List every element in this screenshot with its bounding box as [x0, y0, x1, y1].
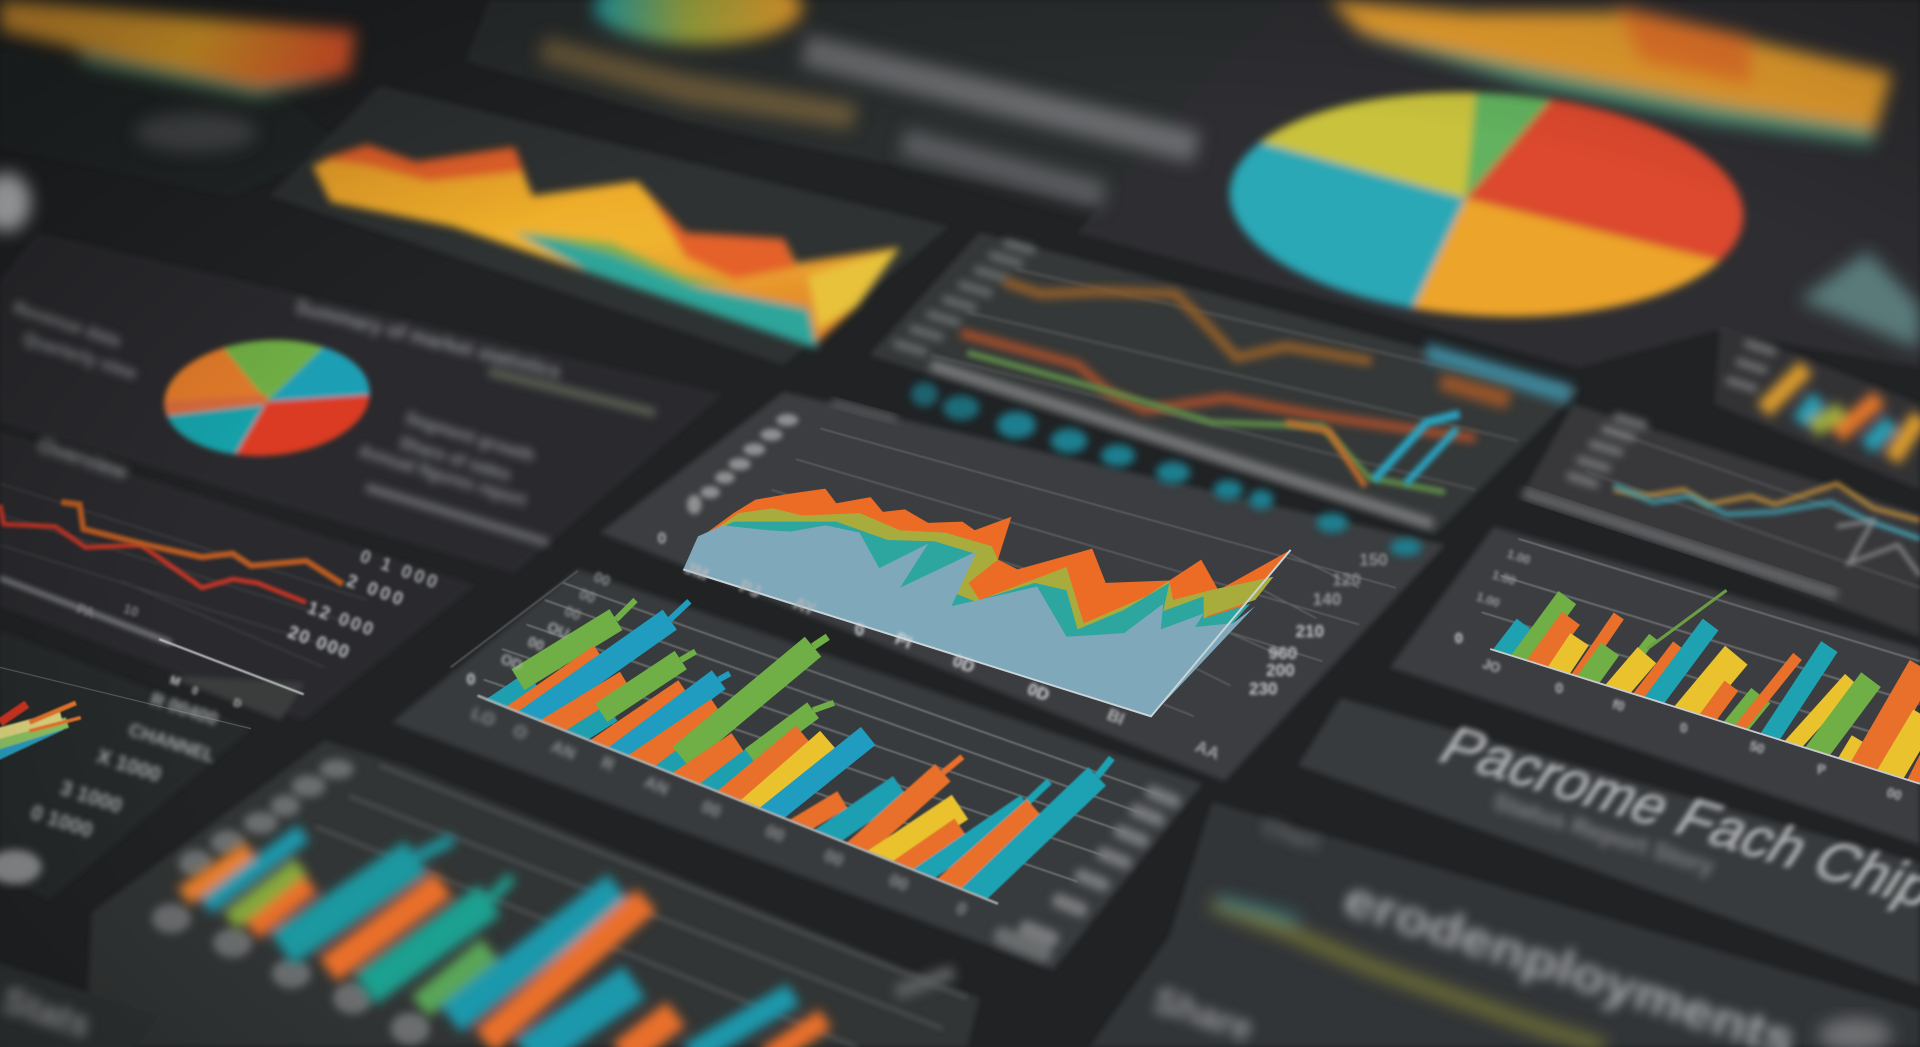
x labels: O [510, 720, 530, 743]
text: pie panel labels: Quarterly view [21, 328, 140, 383]
y labels [152, 759, 430, 1045]
layer: olive [683, 508, 1273, 716]
series: blue [1374, 414, 1460, 480]
bars: second cluster [787, 757, 1112, 903]
y labels: OU [545, 620, 571, 643]
series: orange line [61, 502, 343, 584]
x labels: LO [469, 703, 498, 730]
text lines: blurred top [0, 34, 1200, 231]
series: green [967, 353, 1445, 492]
top blurred charts strip [0, 0, 1920, 349]
labels: 3 1000 [57, 776, 125, 818]
labels: 0 [1680, 720, 1687, 735]
axis labels: 20 000 [285, 621, 352, 662]
y labels [894, 242, 1035, 353]
axis [1490, 649, 1920, 784]
text: lower right blurred [0, 814, 1802, 1047]
text: pie panel labels [11, 296, 656, 546]
labels: 960 [1269, 643, 1297, 663]
chart: faint top centre line [539, 37, 857, 129]
right pills [991, 784, 1183, 965]
labels right [894, 965, 956, 1000]
bar chart: centre [451, 569, 1183, 965]
x labels: AN [548, 736, 579, 764]
labels: PI [892, 628, 915, 653]
text: pie panel labels: Overview [35, 434, 131, 484]
area chart: centre [658, 398, 1396, 764]
bar chart: bottom left [152, 759, 967, 1047]
line chart: top right [894, 242, 1573, 556]
labels: 00 [1885, 785, 1904, 803]
axis labels: 12 000 [305, 596, 376, 639]
axis labels: 10 [122, 601, 140, 620]
pie chart: small [159, 337, 380, 459]
layer: orange [683, 489, 1291, 716]
text: pie panel labels: Segment growth [403, 407, 537, 466]
labels: 150 [1359, 550, 1388, 570]
labels: R 00400 [148, 688, 221, 729]
subtitle: Status Report Story [1490, 788, 1718, 881]
labels: f0 [1611, 696, 1627, 714]
line chart: right [1521, 343, 1920, 600]
series: orange peak [1286, 422, 1365, 486]
axis bar [931, 365, 1433, 524]
dots: teal [911, 382, 1422, 556]
small bars upper right [1763, 367, 1920, 459]
labels: 0 [658, 531, 667, 548]
band: teal [1427, 343, 1573, 404]
area chart: top [312, 144, 900, 349]
labels: CHANNEL [126, 719, 218, 766]
text: lower right blurred: Stats [0, 979, 96, 1046]
bar chart: far left [0, 667, 251, 884]
series [1614, 484, 1920, 520]
y labels: 00 [525, 634, 546, 655]
x labels: R [599, 752, 618, 775]
x labels: 00 [699, 796, 724, 822]
bars: first cluster [480, 600, 1112, 903]
labels: 1.00 [1505, 547, 1532, 567]
y labels: 00 [562, 604, 583, 625]
layer: teal [683, 522, 1250, 716]
labels: AY [791, 593, 819, 620]
labels: 0 [1455, 631, 1463, 647]
labels: 230 [1249, 678, 1278, 698]
y labels: 0 [467, 672, 476, 689]
x labels [469, 703, 970, 920]
axis labels: 0 [190, 685, 200, 698]
x labels: AN [641, 771, 672, 799]
labels: AA [1192, 736, 1223, 764]
labels: 0 [855, 620, 864, 640]
axis labels: M [168, 673, 182, 689]
axis labels: 0 1 000 [357, 545, 441, 592]
y labels: 00 [576, 586, 598, 607]
x labels: 00 [886, 869, 911, 895]
series: red [961, 333, 1476, 438]
text: pie panel labels: Revenue data [11, 297, 124, 351]
labels: 1.00 [1491, 568, 1518, 588]
labels: 200 [1266, 660, 1295, 680]
axis [0, 578, 171, 643]
bars [184, 833, 825, 1047]
axis [478, 696, 998, 904]
labels: 0 1000 [28, 801, 95, 842]
series: red line [0, 505, 306, 602]
layer: light blue [683, 525, 1255, 716]
axis labels [75, 545, 441, 711]
bar chart: right [1455, 539, 1920, 803]
x labels: 00 [821, 845, 847, 870]
chart: top right band [1329, 0, 1892, 144]
band: orange [1439, 373, 1512, 409]
labels: X 1000 [94, 745, 164, 787]
x labels: 00 [763, 820, 788, 846]
axis labels: 2 000 [344, 569, 406, 609]
y labels: OD [498, 651, 525, 674]
labels: 210 [1296, 621, 1324, 641]
labels: 50 [1748, 738, 1767, 757]
y labels [467, 569, 612, 689]
text: pie panel labels: Annual figures report [356, 440, 529, 510]
series: orange dim [1004, 282, 1371, 361]
text: pie panel labels: Summary of market statistics [293, 296, 563, 383]
labels [1455, 547, 1904, 803]
labels: P [1817, 762, 1826, 777]
chart: top left band [0, 0, 355, 98]
labels [28, 688, 221, 842]
axis labels: D [232, 697, 243, 711]
labels: 0D [950, 650, 978, 677]
x labels: 0 [954, 897, 970, 920]
text: pie panel labels: Share of sales [397, 432, 514, 485]
line chart: left [0, 484, 441, 711]
labels: BI [1104, 704, 1128, 729]
pie chart: large [1224, 73, 1763, 331]
left labels [1567, 416, 1647, 485]
labels: PJ [737, 575, 764, 602]
text: lower right blurred: Chart [1260, 814, 1323, 855]
labels: 1.00 [1475, 590, 1502, 610]
labels [658, 531, 1388, 764]
axes [683, 550, 1291, 716]
labels: JO [1481, 656, 1502, 676]
chart: top centre pie fragment [594, 0, 802, 44]
labels: JM [682, 557, 711, 584]
labels: 140 [1313, 589, 1341, 609]
labels: 0 [1555, 681, 1563, 697]
y labels: 00 [591, 569, 612, 590]
chart: lower right line [1212, 900, 1604, 1047]
labels: 0D [1025, 678, 1052, 705]
axis labels: PA [75, 601, 97, 621]
labels: 120 [1332, 569, 1361, 589]
text: lower right blurred: erodenployments [1337, 871, 1802, 1047]
